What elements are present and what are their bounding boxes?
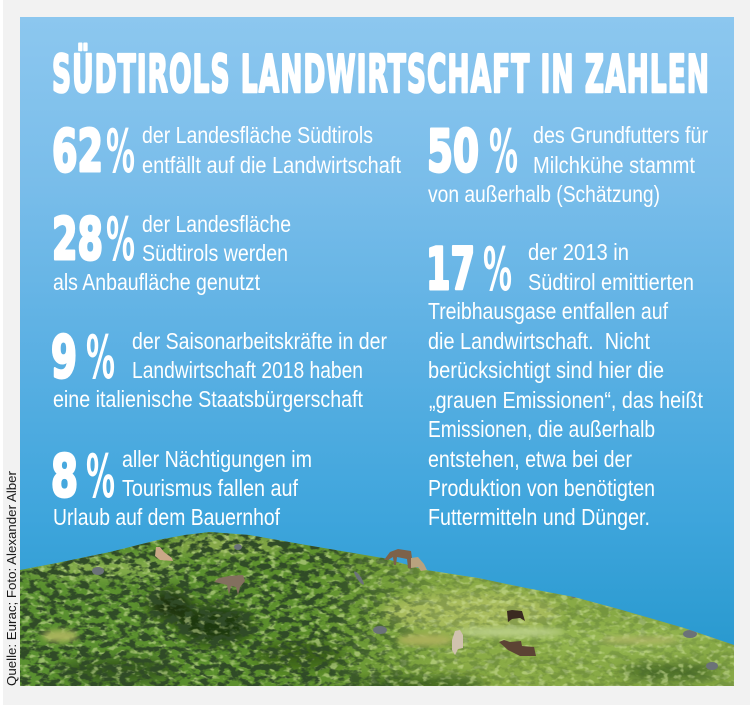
- stat: 17 percent: Südtirol emittierten: [528, 269, 694, 295]
- stat: 9 percent: [51, 323, 387, 412]
- stat: 17 percent: Treibhausgase entfallen auf: [428, 298, 669, 324]
- stat: 62 percent: der Landesfläche Südtirols: [142, 122, 373, 148]
- stat: 17 percent: entstehen, etwa bei der: [428, 446, 632, 472]
- stat: 62 percent: entfällt auf die Landwirtschaft: [142, 152, 402, 178]
- stat: 28 percent: %: [106, 205, 135, 275]
- stat: 50 percent: 50: [427, 117, 479, 185]
- stat: 50 percent: Milchkühe stammt: [533, 152, 696, 178]
- stat: 8 percent: aller Nächtigungen im: [122, 446, 312, 472]
- stat: 62 percent: [52, 117, 402, 187]
- stat: 28 percent: als Anbaufläche genutzt: [53, 269, 261, 295]
- stat: 17 percent: die Landwirtschaft. Nicht: [428, 328, 651, 354]
- stat: 17 percent: Produktion von benötigten: [428, 475, 655, 501]
- photo: hillside with grazing cows: [20, 530, 734, 690]
- stat: 28 percent: [52, 205, 291, 295]
- stat: 17 percent: der 2013 in: [528, 239, 629, 265]
- stat: 17 percent: 17: [426, 235, 475, 303]
- stat: 9 percent: eine italienische Staatsbürgerschaft: [53, 386, 364, 412]
- stat: 9 percent: der Saisonarbeitskräfte in der: [132, 328, 387, 354]
- stat: 17 percent: [426, 235, 704, 530]
- stat: 8 percent: Tourismus fallen auf: [122, 475, 299, 501]
- source credit: Quelle: Eurac; Foto: Alexander Alber: [4, 470, 19, 686]
- stat: 8 percent: 8: [51, 442, 78, 510]
- stat: 50 percent: von außerhalb (Schätzung): [428, 181, 660, 207]
- stat: 62 percent: 62: [52, 117, 103, 185]
- icon: cows: [155, 547, 536, 656]
- stat: 8 percent: %: [86, 442, 115, 512]
- stat: 9 percent: %: [86, 323, 115, 393]
- stat: 9 percent: Landwirtschaft 2018 haben: [132, 357, 363, 383]
- stat: 17 percent: %: [483, 235, 512, 305]
- stat: 28 percent: der Landesfläche: [142, 211, 291, 237]
- stat: 50 percent: [427, 117, 708, 207]
- icon: rocks: [92, 544, 718, 670]
- stat: 8 percent: Urlaub auf dem Bauernhof: [53, 504, 281, 530]
- stat: 8 percent: [51, 442, 312, 530]
- stat: 50 percent: %: [489, 117, 518, 187]
- stat: 62 percent: %: [106, 117, 135, 187]
- stat: 50 percent: des Grundfutters für: [533, 122, 708, 148]
- stat: 17 percent: Futtermitteln und Dünger.: [428, 504, 650, 530]
- stat: 9 percent: 9: [51, 323, 77, 391]
- stat: 28 percent: 28: [52, 205, 103, 273]
- stat: 17 percent: Emissionen, die außerhalb: [428, 416, 655, 442]
- stat: 17 percent: berücksichtigt sind hier die: [428, 357, 664, 383]
- stat: 28 percent: Südtirols werden: [142, 240, 288, 266]
- stat: 17 percent: „grauen Emissionen“, das heißt: [429, 387, 704, 413]
